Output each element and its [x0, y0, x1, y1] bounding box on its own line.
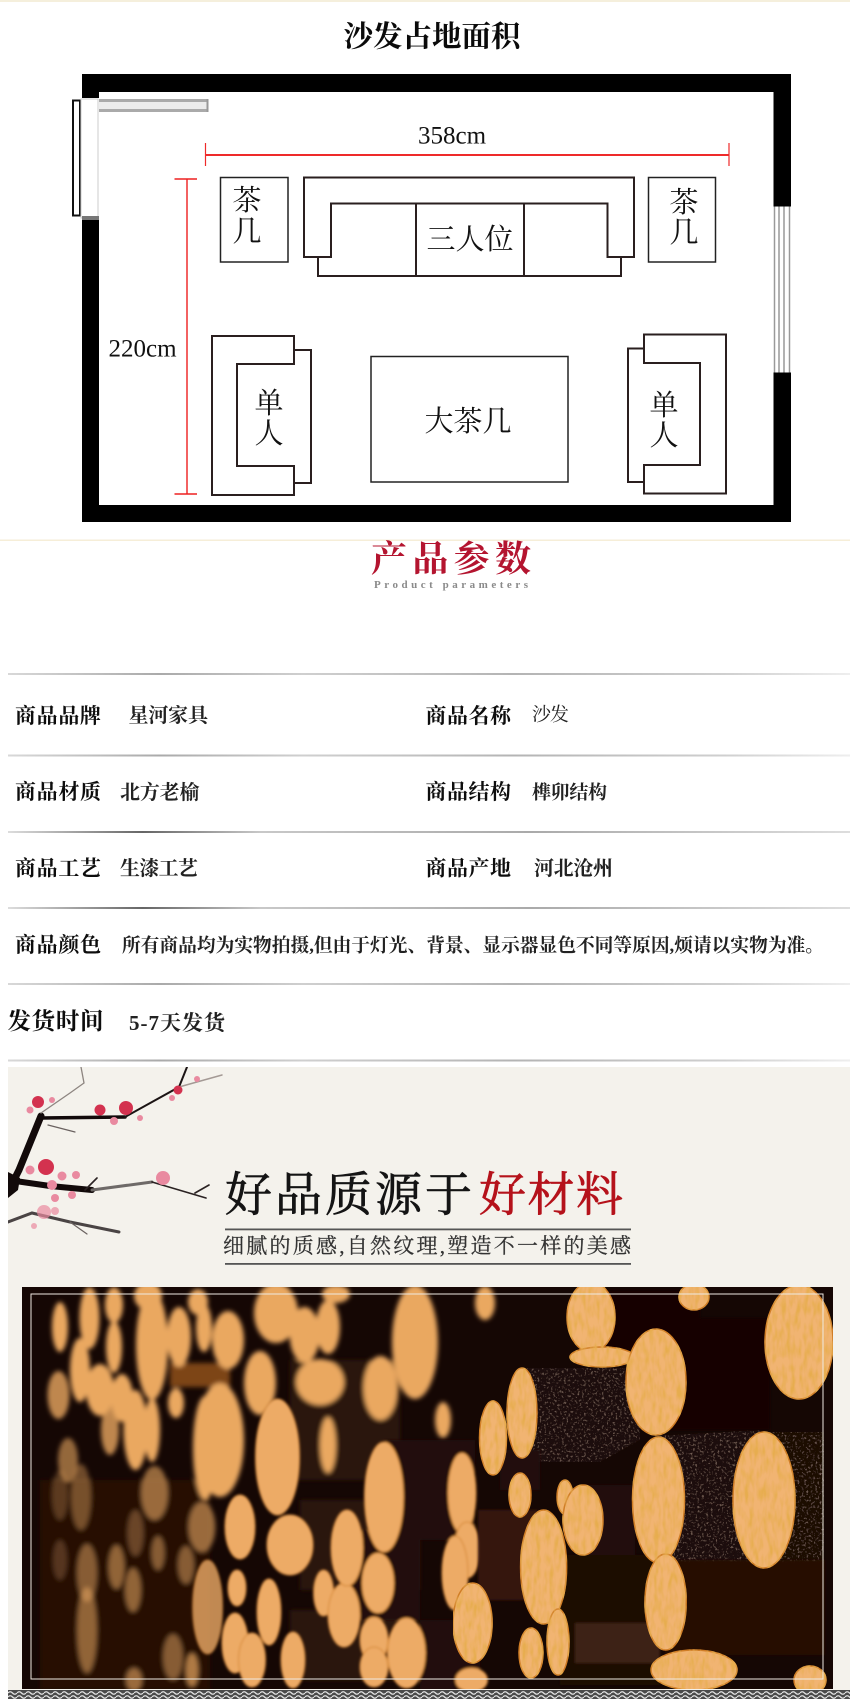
mid-distance logs [190, 1396, 490, 1689]
materials heading: 好材料 [479, 1170, 623, 1222]
floor plan [73, 74, 791, 522]
right single chair [628, 334, 726, 494]
depth label: 220cm [108, 336, 177, 362]
materials heading: 好品质源于 [225, 1170, 472, 1222]
materials heading [225, 1170, 623, 1222]
title: sofa floor area: 沙发占地面积 [343, 20, 523, 54]
left single chair [212, 336, 311, 495]
three-seat sofa: 三人位 [426, 223, 514, 256]
width label: 358cm [418, 122, 487, 150]
door leaf [99, 99, 208, 112]
subtitle with rules: 细腻的质感,自然纹理,塑造不一样的美感 [223, 1234, 631, 1258]
section heading: product parameters: Product parameters [374, 579, 529, 591]
large coffee table [371, 356, 568, 482]
decorative wave strip [8, 1690, 850, 1699]
white inner frame [31, 1294, 823, 1679]
section heading: product parameters: 产品参数 [371, 539, 531, 579]
plum blossom branch [8, 1067, 222, 1234]
far blurred logs [40, 1282, 495, 1692]
width dimension [206, 143, 729, 166]
branches [8, 1067, 222, 1234]
bark bodies [522, 1368, 824, 1572]
parameter table [8, 703, 824, 1035]
right side table: 茶 [669, 186, 699, 219]
wood logs photo [22, 1282, 833, 1694]
brand row: 商品品牌 [15, 704, 101, 728]
brand row [15, 703, 569, 728]
right side table [648, 178, 716, 262]
craft row: 商品工艺 [15, 856, 101, 880]
material row: 商品材质 [15, 780, 101, 804]
sharp foreground log ends [453, 1282, 833, 1694]
top cream strip [0, 0, 850, 2]
shipping row [8, 1008, 228, 1035]
brand row: 星河家具 [128, 703, 211, 727]
material row: 榫卯结构 [532, 780, 607, 804]
right window [774, 206, 791, 372]
right single chair: 单 [649, 389, 679, 422]
material row: 商品结构 [426, 780, 511, 804]
room walls [82, 74, 791, 522]
brand row: 商品名称 [426, 704, 513, 728]
right single chair: 人 [649, 420, 679, 452]
shipping row: 5-7天发货 [129, 1011, 228, 1035]
materials panel background [8, 1067, 850, 1690]
craft row: 河北沧州 [534, 857, 613, 880]
left side table [220, 178, 288, 262]
depth dimension [174, 179, 197, 494]
craft row: 生漆工艺 [120, 857, 198, 880]
colour row: 所有商品均为实物拍摄,但由于灯光、背景、显示器显色不同等原因,烦请以实物为准。 [122, 934, 824, 956]
left single chair: 单 [254, 387, 284, 420]
parameter rules [8, 673, 850, 1062]
brand row: 沙发 [532, 704, 569, 726]
blossoms [26, 1076, 200, 1229]
left side table: 茶 [232, 184, 262, 217]
material row [15, 780, 607, 804]
cream separator [0, 540, 850, 541]
three-seat sofa [304, 178, 634, 276]
colour row: 商品颜色 [15, 933, 101, 957]
craft row [15, 856, 613, 880]
left window opening [73, 98, 99, 220]
craft row: 商品产地 [426, 856, 511, 880]
shaded log sides [476, 1426, 825, 1684]
large coffee table: 大茶几 [424, 405, 512, 438]
shipping row: 发货时间 [8, 1008, 104, 1035]
material row: 北方老榆 [120, 781, 200, 804]
left side table: 几 [232, 216, 262, 248]
left single chair: 人 [254, 418, 284, 450]
right side table: 几 [669, 217, 699, 249]
